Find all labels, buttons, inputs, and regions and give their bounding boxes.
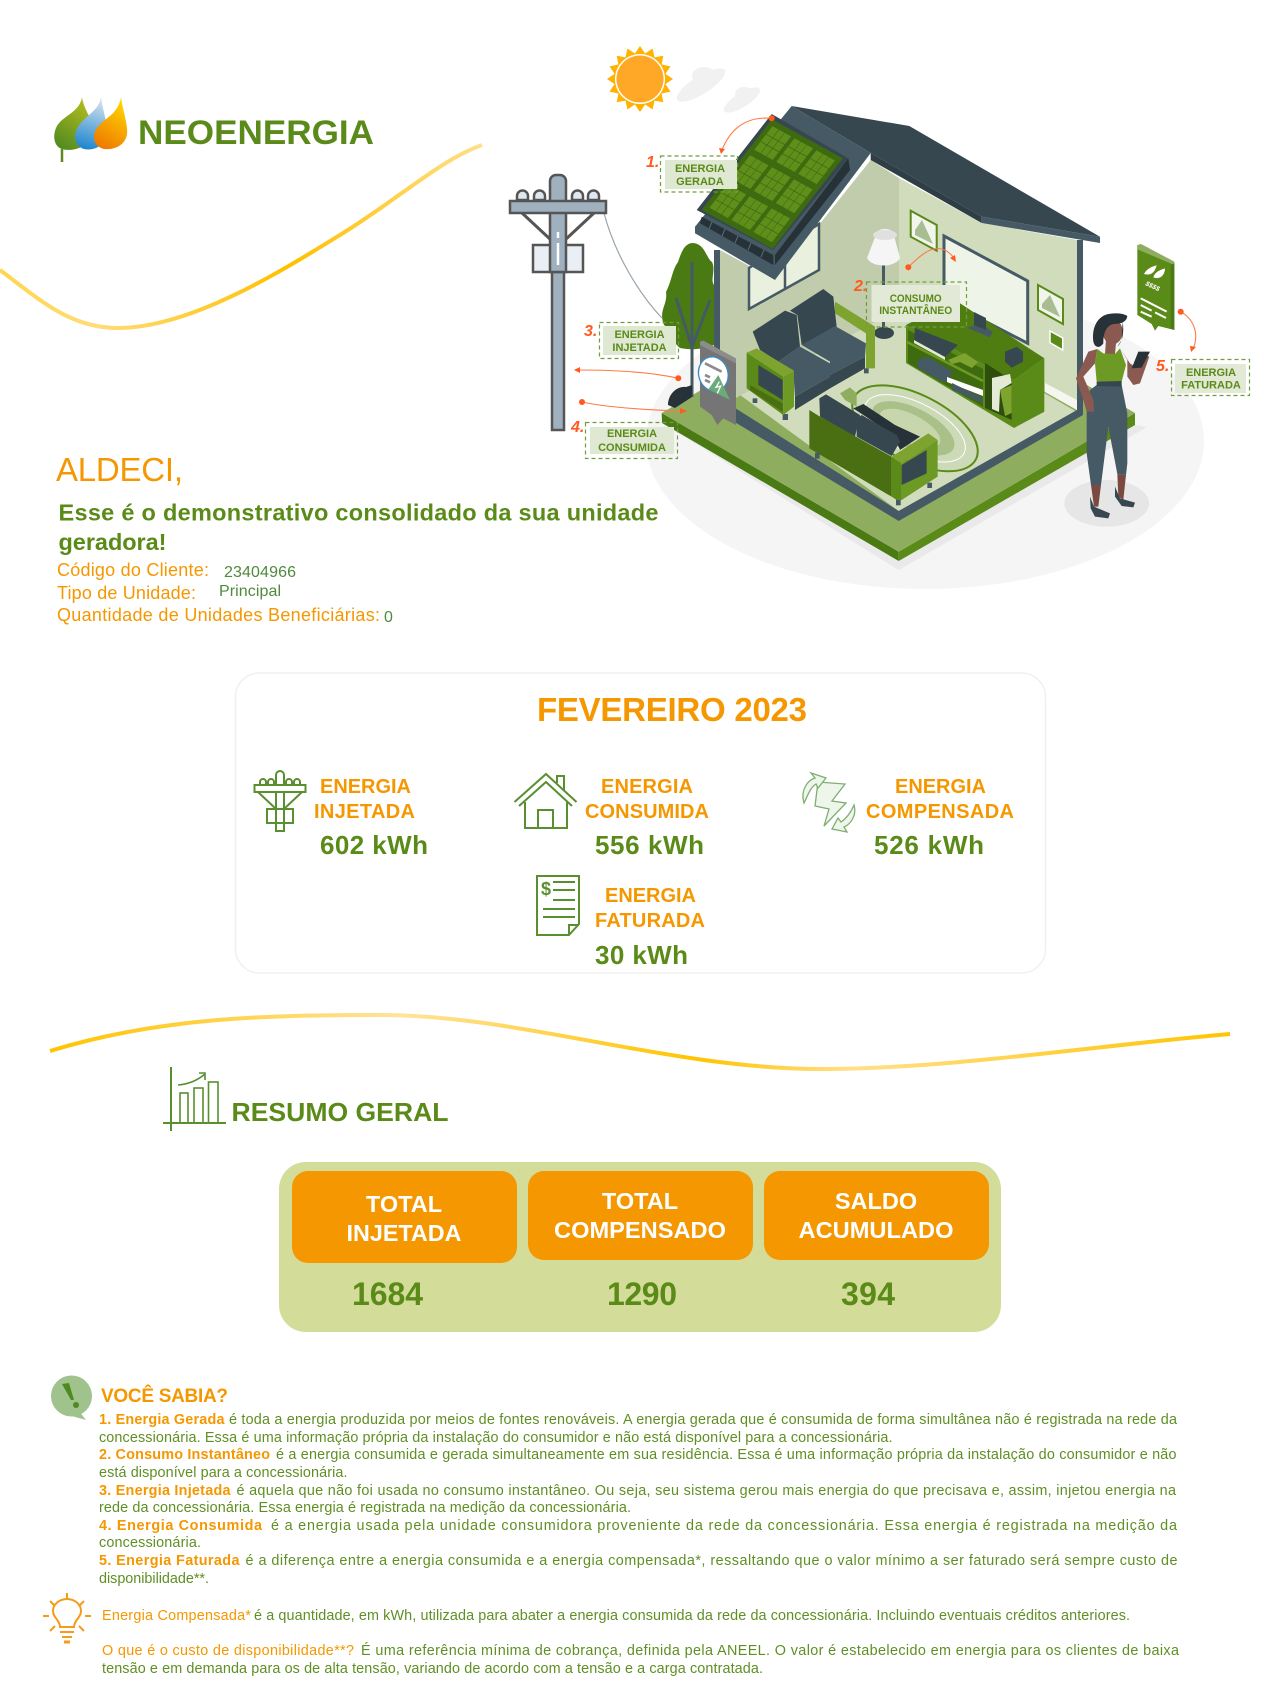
saldo acumulado card: ACUMULADO <box>798 1217 954 1243</box>
arrow: injected energy <box>574 367 681 381</box>
note: custo de disponibilidade: É uma referência mínima de cobrança, definida pela ANEEL. O valor é estabelecido em energia para os clientes de baixa <box>361 1642 1179 1659</box>
arrow: generated energy <box>719 115 775 154</box>
customer details: Tipo de Unidade: <box>57 583 196 603</box>
clouds <box>672 63 764 117</box>
wall pictures <box>911 211 1063 350</box>
stat: energia compensada: ENERGIA <box>895 776 986 798</box>
total injetada card: INJETADA <box>346 1220 462 1246</box>
definitions text block: é toda a energia produzida por meios de fontes renováveis. A energia gerada que é consumida de forma simultânea não é registrada na rede da <box>229 1412 1177 1428</box>
stat: energia faturada: FATURADA <box>595 910 705 932</box>
intro heading <box>58 500 658 555</box>
stat: energia compensada: 526 kWh <box>874 830 984 860</box>
note: custo de disponibilidade <box>102 1642 1179 1677</box>
stat: energia faturada <box>595 885 705 970</box>
saldo acumulado card <box>764 1171 989 1260</box>
label 2: consumo instantaneo: INSTANTÂNEO <box>879 304 953 317</box>
arrow: consumed energy <box>579 399 687 414</box>
panel: monthly energy <box>236 673 1046 973</box>
label 5: energia faturada: 5. <box>1156 358 1169 375</box>
stat: energia injetada <box>314 776 428 860</box>
label 2: consumo instantaneo <box>853 278 966 327</box>
definitions text block: 4. Energia Consumida <box>99 1518 263 1534</box>
label 1: energia gerada <box>646 154 738 192</box>
icon: utility pole <box>254 771 306 831</box>
icon: growth chart <box>163 1067 226 1131</box>
heading: voce sabia: VOCÊ SABIA? <box>101 1385 228 1407</box>
customer details <box>57 560 393 626</box>
definitions text block: 5. Energia Faturada <box>99 1553 240 1569</box>
month heading: FEVEREIRO 2023 <box>537 691 807 728</box>
logo: Neoenergia: NEOENERGIA <box>138 114 374 152</box>
intro heading: geradora! <box>58 529 166 555</box>
invoice icon: $$$$ <box>1143 280 1161 293</box>
definitions text block: concessionária. <box>99 1535 201 1551</box>
heading: resumo geral: RESUMO GERAL <box>232 1097 449 1127</box>
invoice icon <box>1137 244 1174 331</box>
definitions text block <box>99 1412 1178 1587</box>
label 4: energia consumida: 4. <box>570 419 584 436</box>
definitions text block: rede da concessionária. Essa energia é registrada na medição da concessionária. <box>99 1500 631 1516</box>
definitions text block: 1. Energia Gerada <box>99 1412 225 1428</box>
front sofa <box>809 387 938 505</box>
label 4: energia consumida: ENERGIA <box>607 428 657 440</box>
icon: bill <box>537 876 579 935</box>
value: total injetada: 1684 <box>352 1276 423 1312</box>
customer details: Principal <box>219 583 281 600</box>
total injetada card: TOTAL <box>366 1191 442 1217</box>
label 2: consumo instantaneo: CONSUMO <box>890 293 942 305</box>
decorative wave: middle <box>50 1015 1230 1069</box>
total compensado card: COMPENSADO <box>554 1217 726 1243</box>
media shelf <box>906 300 1044 428</box>
electric meter sign <box>695 341 736 425</box>
arrow: billed energy <box>1178 309 1196 352</box>
platform <box>662 275 1147 570</box>
window <box>749 224 819 309</box>
stat: energia consumida: CONSUMIDA <box>585 801 709 823</box>
rug <box>839 368 991 489</box>
label 5: energia faturada: FATURADA <box>1181 380 1241 392</box>
logo: Neoenergia <box>54 97 374 162</box>
total compensado card <box>528 1171 753 1260</box>
label 5: energia faturada: ENERGIA <box>1186 367 1236 379</box>
walls and floor <box>714 160 1083 521</box>
value: saldo acumulado: 394 <box>841 1276 895 1312</box>
customer details: 23404966 <box>224 564 296 581</box>
label 3: energia injetada: ENERGIA <box>614 329 665 341</box>
customer name: ALDECI, <box>56 451 183 488</box>
stat: energia consumida: 556 kWh <box>595 830 704 860</box>
ground shadow <box>646 293 1204 589</box>
stat: energia consumida <box>585 776 709 860</box>
icon: exclamation bubble <box>51 1376 92 1420</box>
total injetada card <box>292 1171 517 1263</box>
television <box>944 236 1028 343</box>
definitions text block: 2. Consumo Instantâneo <box>99 1447 270 1463</box>
definitions text block: disponibilidade**. <box>99 1571 209 1587</box>
panel: totals <box>279 1162 1001 1332</box>
stat: energia injetada: ENERGIA <box>320 776 411 798</box>
icon: bill: $ <box>541 879 551 899</box>
label 4: energia consumida: CONSUMIDA <box>598 442 666 454</box>
definitions text block: 3. Energia Injetada <box>99 1483 231 1499</box>
icon: light bulb <box>43 1593 91 1642</box>
floor lamp <box>867 229 900 339</box>
stat: energia compensada: COMPENSADA <box>866 801 1014 823</box>
note: energia compensada: Energia Compensada* <box>102 1608 251 1624</box>
customer details: 0 <box>384 609 393 626</box>
arrow: instant consumption <box>905 248 956 270</box>
stat: energia consumida: ENERGIA <box>601 776 693 798</box>
label 3: energia injetada: INJETADA <box>612 342 667 354</box>
definitions text block: é a diferença entre a energia consumida e a energia compensada*, ressaltando que o valor mínimo a ser faturado será sempre custo de <box>246 1553 1178 1569</box>
customer details: Código do Cliente: <box>57 560 209 580</box>
definitions text block: está disponível para a concessionária. <box>99 1465 348 1481</box>
label 3: energia injetada: 3. <box>584 323 597 340</box>
decorative wave: top <box>0 145 482 328</box>
stat: energia compensada <box>866 776 1014 860</box>
stat: energia faturada: ENERGIA <box>605 885 696 907</box>
roof <box>695 106 1100 280</box>
label 4: energia consumida <box>570 419 678 458</box>
armchair sofa <box>747 289 875 420</box>
label 5: energia faturada <box>1156 358 1250 396</box>
value: total compensado: 1290 <box>607 1276 677 1312</box>
woman with phone <box>1064 313 1150 527</box>
icon: house <box>514 774 576 828</box>
utility pole <box>510 175 662 430</box>
sun <box>607 46 673 112</box>
label 2: consumo instantaneo: 2. <box>853 278 867 295</box>
note: custo de disponibilidade: O que é o custo de disponibilidade**? <box>102 1643 354 1659</box>
stat: energia injetada: INJETADA <box>314 801 415 823</box>
definitions text block: é a energia usada pela unidade consumidora proveniente da rede da concessionária. Essa energia é registrada na medição da <box>271 1518 1177 1534</box>
total compensado card: TOTAL <box>602 1188 678 1214</box>
customer details: Quantidade de Unidades Beneficiárias: <box>57 605 380 625</box>
intro heading: Esse é o demonstrativo consolidado da sua unidade <box>58 500 658 526</box>
solar panels <box>697 114 850 265</box>
stat: energia faturada: 30 kWh <box>595 940 688 970</box>
label 1: energia gerada: GERADA <box>676 176 724 188</box>
label 1: energia gerada: 1. <box>646 154 659 171</box>
icon: compensated energy bolt <box>803 773 855 832</box>
label 3: energia injetada <box>584 322 678 358</box>
tree <box>662 243 714 408</box>
stat: energia injetada: 602 kWh <box>320 830 428 860</box>
definitions text block: é aquela que não foi usada no consumo instantâneo. Ou seja, seu sistema gerou mais energia do que precisava e, assim, injetou energia na <box>236 1483 1176 1499</box>
definitions text block: é a energia consumida e gerada simultaneamente em sua residência. Essa é uma informação própria da instalação do consumidor e não <box>276 1447 1176 1463</box>
illustration: house with solar panels <box>646 63 1204 589</box>
definitions text block: concessionária. Essa é uma informação própria da instalação do consumidor e não está disponível para a concessionária. <box>99 1430 892 1446</box>
note: energia compensada: é a quantidade, em kWh, utilizada para abater a energia consumida da rede da concessionária. Incluindo eventuais créditos anteriores. <box>254 1608 1130 1624</box>
saldo acumulado card: SALDO <box>835 1188 917 1214</box>
note: custo de disponibilidade: tensão e em demanda para os de alta tensão, variando de acordo com a tensão e a carga contratada. <box>102 1661 763 1677</box>
label 1: energia gerada: ENERGIA <box>675 163 725 175</box>
